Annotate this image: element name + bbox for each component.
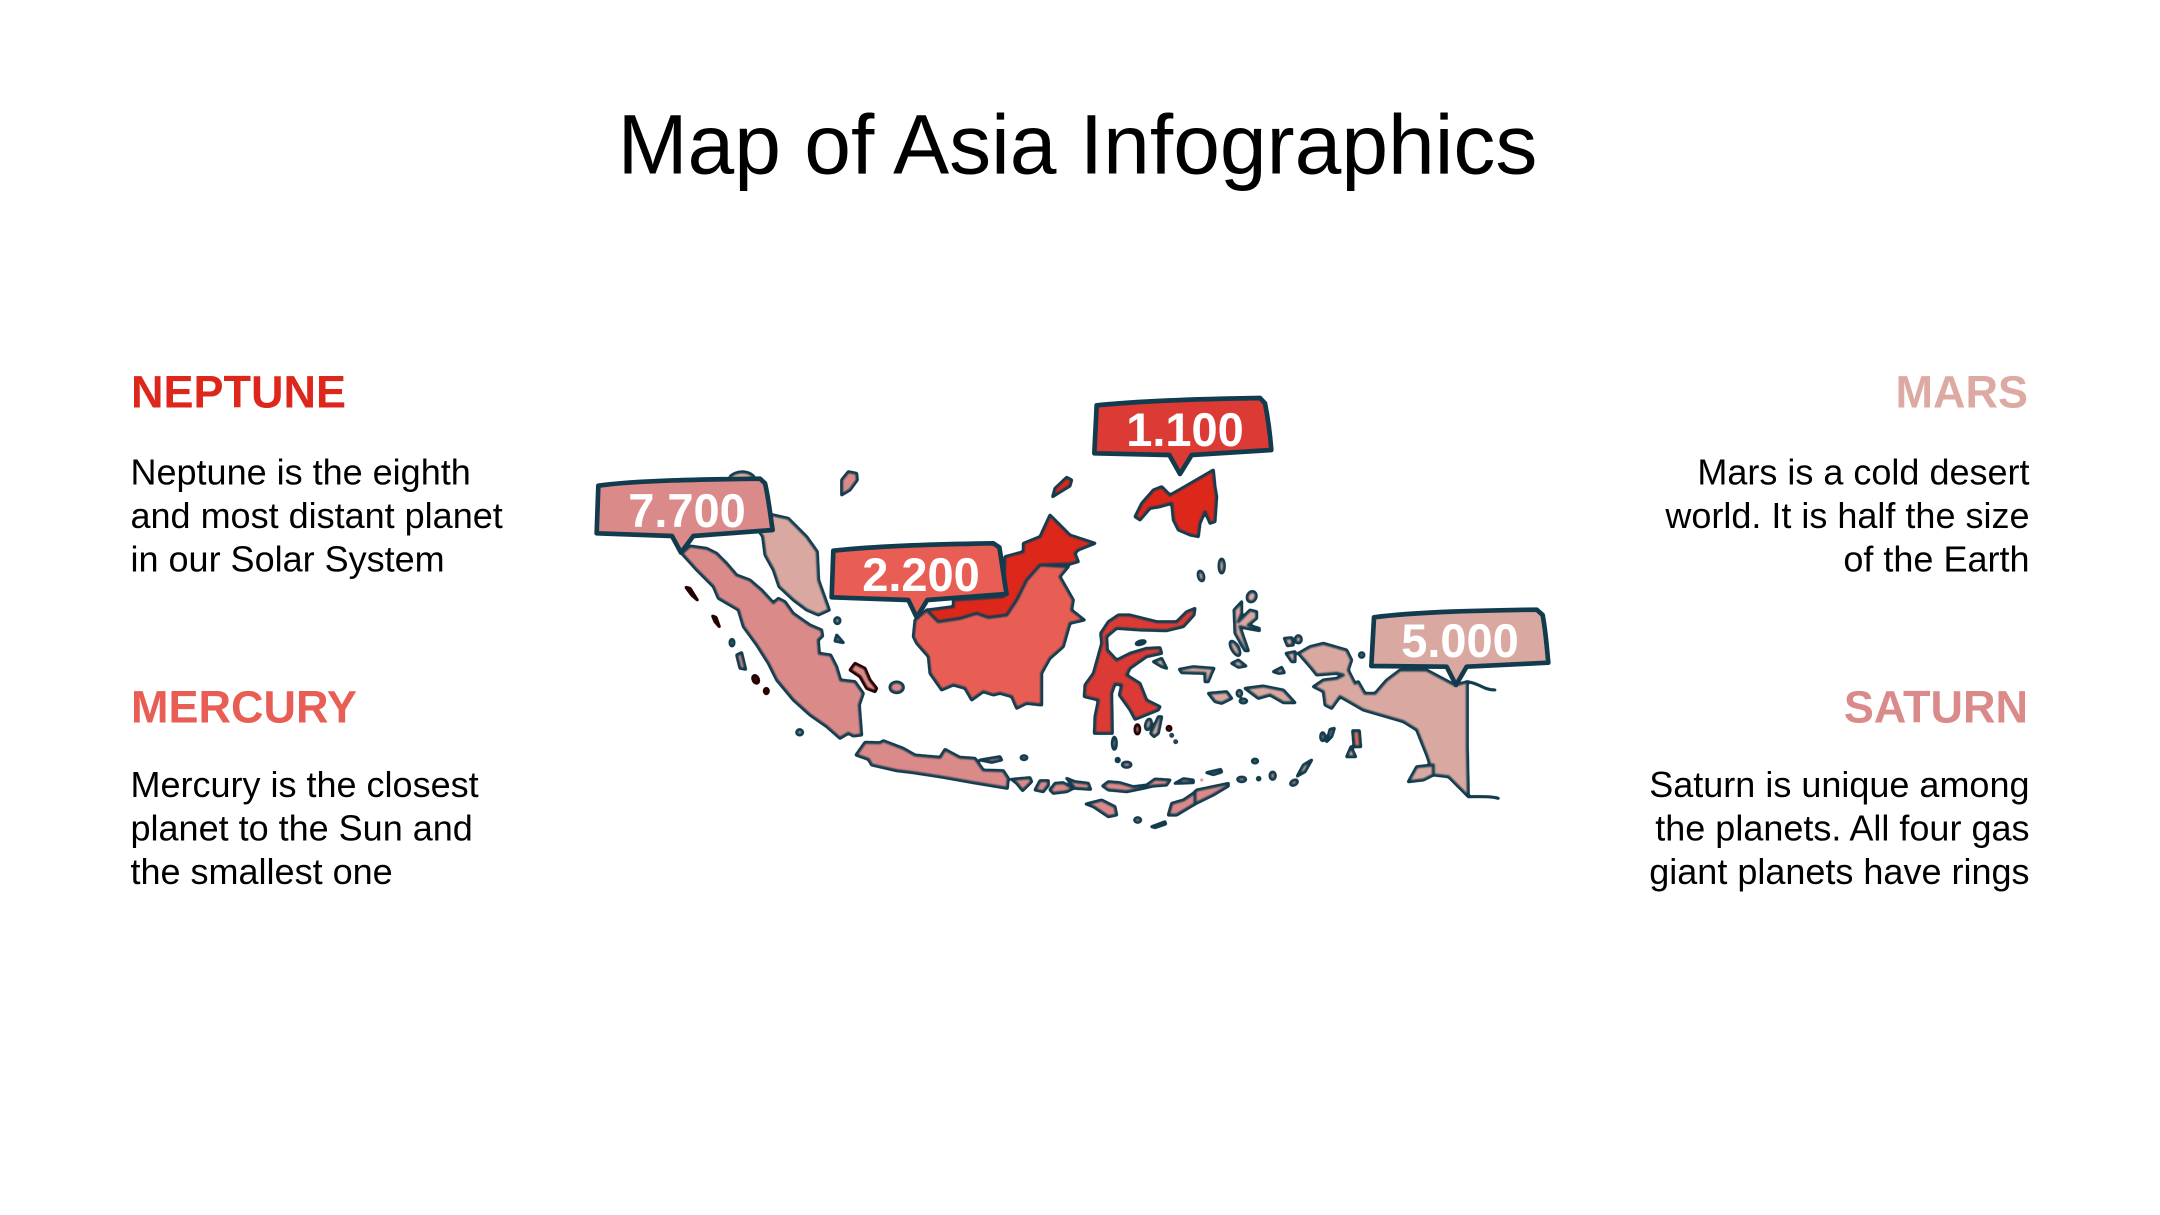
callout: 2.200: 2.200 bbox=[862, 548, 980, 601]
papua border lines bbox=[1467, 682, 1498, 798]
text: saturn description: Saturn is unique among bbox=[1649, 764, 2030, 805]
map: indonesia bbox=[682, 470, 1498, 828]
callout: 5.000 bbox=[1371, 610, 1548, 685]
island: north borneo bbox=[927, 515, 1095, 622]
heading: mercury: MERCURY bbox=[131, 682, 357, 732]
callout: 7.700 bbox=[597, 479, 773, 553]
text: mercury description: Mercury is the closest bbox=[130, 764, 479, 805]
island: papua bbox=[1298, 643, 1468, 797]
heading: mars: MARS bbox=[1896, 366, 2028, 418]
southern islands bbox=[856, 737, 1275, 828]
island: kalimantan bbox=[913, 565, 1084, 708]
callout: 2.200 bbox=[832, 543, 1007, 617]
callout: 7.700: 7.700 bbox=[628, 484, 746, 537]
lesser sunda islands bbox=[980, 737, 1275, 828]
panel: neptune bbox=[130, 366, 503, 579]
text: mars description: Mars is a cold desert bbox=[1697, 451, 2030, 492]
text: mars description: of the Earth bbox=[1843, 538, 2030, 579]
eastern islands bbox=[1084, 470, 1498, 798]
title: Map of Asia Infographics bbox=[618, 98, 1537, 192]
small islands west bbox=[686, 472, 1072, 735]
heading: saturn: SATURN bbox=[1844, 682, 2028, 732]
island: sulawesi bbox=[1084, 608, 1195, 733]
panel: saturn bbox=[1649, 682, 2030, 892]
panel: mars bbox=[1664, 366, 2030, 579]
small islands east bbox=[1135, 559, 1433, 787]
callout: 1.100: 1.100 bbox=[1126, 403, 1244, 456]
island: northern red island bbox=[1135, 470, 1217, 537]
island: malay peninsula bbox=[730, 472, 829, 615]
text: mars description: world. It is half the size bbox=[1664, 495, 2030, 536]
text: neptune description: Neptune is the eighth bbox=[130, 451, 471, 492]
panel: mercury bbox=[130, 682, 479, 892]
island: java bbox=[856, 741, 1008, 788]
text: saturn description: the planets. All four gas bbox=[1655, 808, 2030, 848]
text: neptune description: and most distant planet bbox=[130, 495, 503, 536]
text: neptune description: in our Solar System bbox=[130, 538, 445, 579]
callout: 1.100 bbox=[1094, 398, 1271, 474]
island: sumatra bbox=[682, 546, 863, 738]
text: mercury description: the smallest one bbox=[130, 851, 393, 892]
text: mercury description: planet to the Sun and bbox=[130, 808, 473, 848]
western islands bbox=[682, 472, 1095, 738]
text: saturn description: giant planets have rings bbox=[1649, 851, 2030, 892]
callout: 5.000: 5.000 bbox=[1401, 614, 1519, 667]
heading: neptune: NEPTUNE bbox=[131, 366, 346, 418]
